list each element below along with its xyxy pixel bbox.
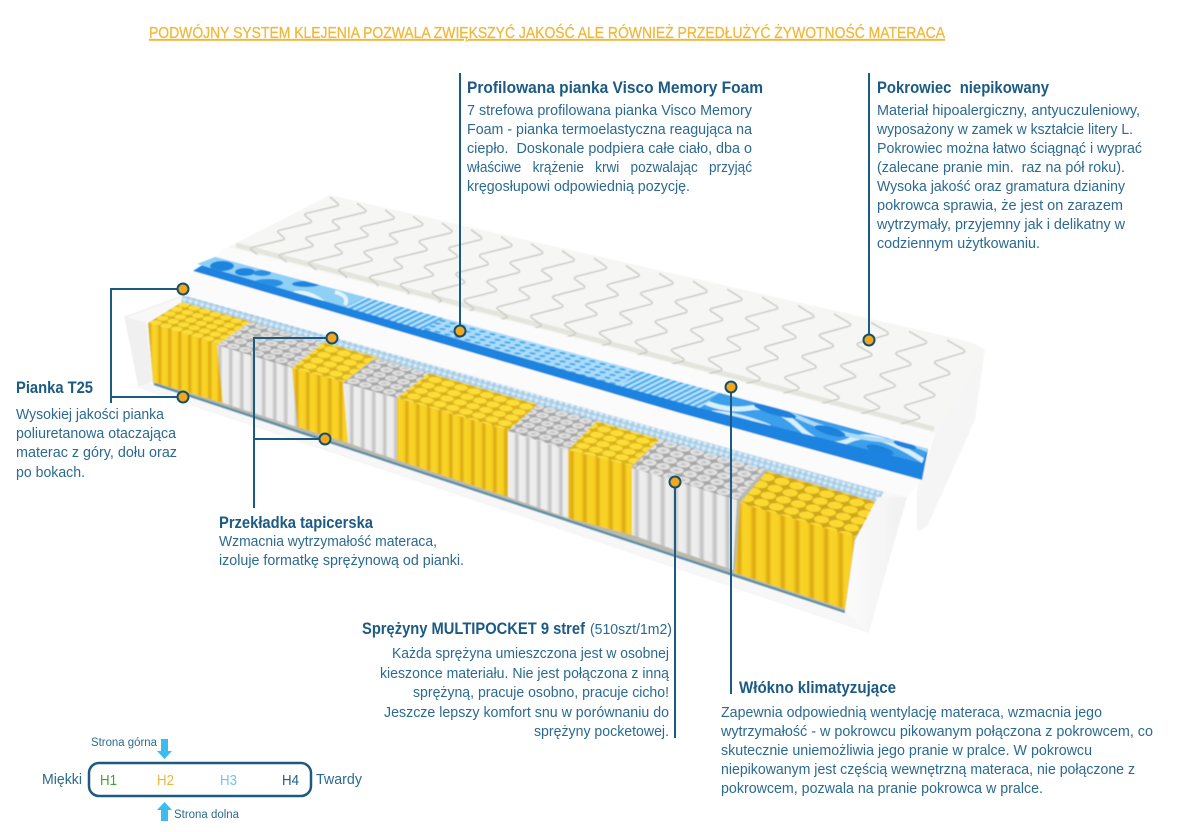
body text: (zalecane pranie min. raz na pół roku). (877, 160, 1125, 176)
body text: 7 strefowa profilowana pianka Visco Memory (467, 103, 753, 119)
body text: Zapewnia odpowiednią wentylację materaca, wzmacnia jego (721, 705, 1102, 721)
body text: Wysokiej jakości pianka (16, 407, 165, 423)
body text (466, 103, 753, 195)
leader line and marker (670, 476, 680, 738)
upholstery spacer mesh (181, 295, 884, 502)
dots zone (423, 318, 640, 386)
outer foam frame (125, 296, 907, 632)
panel: upholstery spacer (219, 332, 464, 569)
body text: Materiał hipoalergiczny, antyuczuleniowy, (877, 103, 1140, 119)
zone 5 yellow (397, 373, 540, 497)
body text (720, 705, 1153, 797)
body text (380, 646, 670, 740)
body text: Pokrowiec można łatwo ściągnąć i wyprać (877, 141, 1142, 157)
zone 1 yellow (148, 302, 256, 403)
body text: izoluje formatkę sprężynową od pianki. (219, 553, 464, 569)
heading: Przekładka tapicerska (219, 514, 374, 532)
heading: Profilowana pianka Visco Memory Foam (467, 79, 763, 97)
title: PODWÓJNY SYSTEM KLEJENIA POZWALA ZWIĘKSZYĆ JAKOŚĆ ALE RÓWNIEŻ PRZEDŁUŻYĆ ŻYWOTNOŚĆ MATERACA (149, 23, 945, 42)
heading: Pokrowiec niepikowany (877, 79, 1050, 97)
body text (219, 534, 464, 569)
spring cavity (148, 302, 878, 611)
spring density note: (510szt/1m2) (590, 622, 672, 638)
white band under cover (215, 247, 935, 449)
body text: sprężyny pocketowej. (534, 724, 669, 740)
cavity floor (154, 384, 845, 612)
heading: Włókno klimatyzujące (739, 679, 896, 697)
body text: kręgosłupowi odpowiednią pozycję. (467, 179, 690, 195)
stripes zone 1 (345, 297, 443, 330)
stripes zone 2 (620, 371, 720, 408)
scale box (89, 763, 311, 796)
right frame wall (845, 497, 907, 632)
body text: sprężyną, pracuje osobno, pracuje cicho! (413, 685, 669, 701)
body text: wytrzymałość - w pokrowcu pikowanym połączona z pokrowcem, co (720, 724, 1153, 740)
body text: Każda sprężyna umieszczona jest w osobnej (392, 646, 669, 662)
panel: profiled foam (454, 73, 763, 336)
body text: poliuretanowa otaczająca (16, 426, 177, 442)
leader lines and markers (111, 284, 188, 403)
zone 9 yellow (735, 471, 880, 609)
leader line and marker (864, 73, 874, 346)
H4: H4 (282, 773, 299, 789)
cover side face (917, 348, 985, 532)
body text: niepikowanym jest częścią wewnętrzną materaca, nie połączone z (721, 762, 1135, 778)
leader line and marker (726, 382, 736, 694)
panel: springs (362, 476, 680, 740)
body text: pokrowca sprawia, że jest on zarazem (877, 198, 1123, 214)
body text: kieszonce materiału. Nie jest połączona z inną (380, 666, 670, 682)
zone 4 grey (343, 358, 429, 460)
panel: T25 foam (16, 284, 188, 481)
quilted top cover (230, 196, 984, 432)
icon: arrow up (157, 802, 172, 821)
body text: Wzmacnia wytrzymałość materaca, (219, 534, 437, 550)
body text: Foam - pianka termoelastyczna reagująca na (467, 122, 753, 138)
body text: Jeszcze lepszy komfort snu w porównaniu do (384, 705, 669, 721)
H3: H3 (220, 773, 237, 789)
zone 8 grey (632, 439, 765, 570)
heading: Sprężyny MULTIPOCKET 9 stref (362, 620, 585, 638)
body text: wyposażony w zamek w kształcie litery L. (876, 122, 1133, 138)
mattress illustration (125, 195, 985, 632)
label top side: Strona górna (91, 737, 158, 749)
zone 6 grey (508, 404, 597, 518)
body text: codziennym użytkowaniu. (877, 236, 1040, 252)
body text: ciepło. Doskonale podpiera całe ciało, dba o (467, 141, 752, 157)
body text: materac z góry, dołu oraz (16, 445, 177, 461)
zone 3 yellow (292, 342, 380, 443)
zone 7 yellow (568, 421, 660, 535)
left wave zone (197, 256, 364, 308)
icon: arrow down (157, 739, 172, 759)
springs zones (148, 302, 880, 609)
body text: po bokach. (16, 465, 85, 481)
H2: H2 (157, 773, 174, 789)
body text: Wysoka jakość oraz gramatura dzianiny (877, 179, 1126, 195)
body text: skutecznie uniemożliwia jego pranie w pralce. W pokrowcu (721, 743, 1092, 759)
right wave zone (701, 394, 928, 464)
label bottom side: Strona dolna (174, 809, 240, 821)
panel: firmness scale (42, 737, 363, 821)
body text: wytrzymały, przyjemny jak i delikatny w (876, 217, 1126, 233)
body text: właściwe krążenie krwi pozwalając przyjąć (466, 160, 752, 176)
body text: pokrowcem, pozwala na pranie pokrowca w pralce. (721, 781, 1043, 797)
body text (16, 407, 177, 481)
panel: climate fibre (720, 382, 1153, 797)
leader line and marker (454, 73, 466, 336)
zone 2 grey (217, 322, 326, 427)
panel: cover (864, 73, 1142, 346)
label soft: Miękki (42, 772, 82, 788)
heading: Pianka T25 (16, 379, 93, 397)
body text (876, 103, 1142, 252)
H1: H1 (100, 773, 117, 789)
white layer below foam (183, 271, 922, 497)
visco memory foam layer (190, 250, 935, 480)
label hard: Twardy (316, 772, 363, 788)
quilting pattern (250, 196, 966, 425)
leader lines and markers (254, 332, 338, 508)
